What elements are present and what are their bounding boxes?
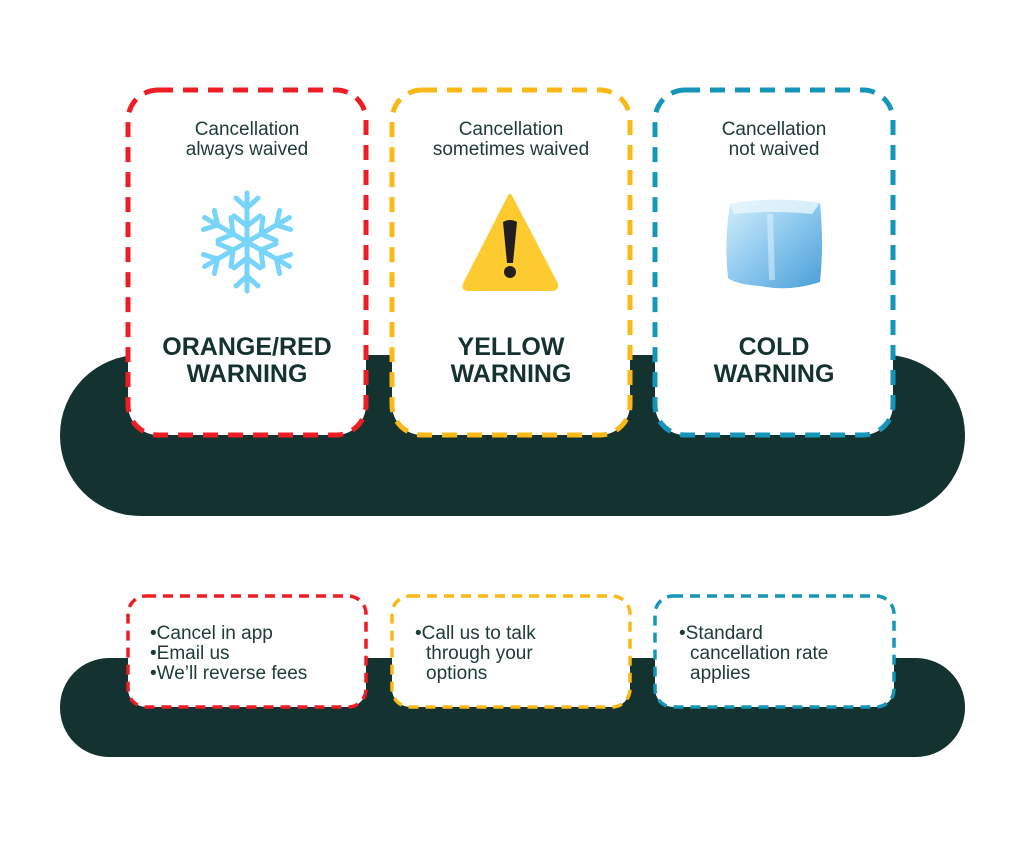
panel: blue actions xyxy=(655,596,894,707)
panel: orange/red warning xyxy=(128,90,366,435)
panel: red actions: •Email us xyxy=(150,643,230,664)
text: not waived: Cancellation xyxy=(722,119,826,140)
dark pill: top band xyxy=(60,355,965,516)
panel: blue actions: applies xyxy=(690,663,750,684)
icon: warning triangle xyxy=(464,196,556,289)
panel: yellow actions xyxy=(392,596,630,707)
icon: ice cube xyxy=(726,200,822,288)
text: sometimes waived: Cancellation xyxy=(459,119,563,140)
panel: yellow actions: options xyxy=(426,663,487,684)
panel: cold warning xyxy=(655,90,893,435)
heading: YELLOW WARNING: YELLOW xyxy=(458,333,564,361)
panel: blue actions: •Standard xyxy=(679,623,763,644)
text: always waived: Cancellation xyxy=(195,119,299,140)
heading: YELLOW WARNING: WARNING xyxy=(451,360,571,388)
text: not waived: not waived xyxy=(729,139,819,160)
panel: red actions: •Cancel in app xyxy=(150,623,273,644)
panel: red actions: •We’ll reverse fees xyxy=(150,663,307,684)
panel: yellow actions: through your xyxy=(426,643,533,664)
heading: COLD WARNING: COLD xyxy=(739,333,809,361)
panel: yellow warning xyxy=(392,90,630,435)
panel: blue actions: cancellation rate xyxy=(690,643,828,664)
icon: snowflake xyxy=(198,193,296,291)
heading: COLD WARNING: WARNING xyxy=(714,360,834,388)
dark pill: bottom band xyxy=(60,658,965,757)
text: always waived: always waived xyxy=(186,139,308,160)
heading: ORANGE/RED WARNING: WARNING xyxy=(187,360,307,388)
text: sometimes waived: sometimes waived xyxy=(433,139,589,160)
panel: yellow actions: •Call us to talk xyxy=(415,623,536,644)
heading: ORANGE/RED WARNING: ORANGE/RED xyxy=(162,333,332,361)
panel: red actions xyxy=(128,596,366,707)
